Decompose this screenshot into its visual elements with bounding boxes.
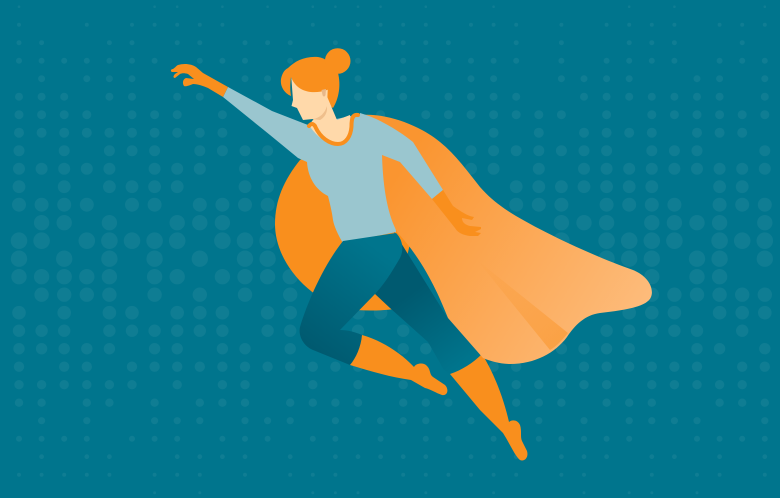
- hair bun: [325, 48, 351, 74]
- neck and chest: [309, 94, 351, 144]
- raised hand: [171, 64, 228, 97]
- near leg trousers: [300, 233, 402, 365]
- cape: back round section: [275, 120, 420, 310]
- superhero figure: [171, 48, 652, 461]
- face: [291, 72, 328, 120]
- cape: front flowing section: [362, 115, 652, 364]
- head: [281, 48, 358, 144]
- collar: [309, 115, 358, 144]
- ear: [322, 89, 326, 96]
- neck shadow: [312, 101, 327, 120]
- far lower leg and foot: [450, 354, 527, 461]
- torso and raised arm sleeve: [223, 87, 396, 243]
- lowered arm sleeve: [360, 113, 443, 199]
- lowered hand: [432, 190, 481, 236]
- near lower leg and foot: [350, 335, 447, 395]
- hair behind neck: [318, 73, 339, 108]
- cape fold: [477, 260, 568, 350]
- hair: [281, 57, 339, 96]
- far leg trousers: [375, 230, 481, 374]
